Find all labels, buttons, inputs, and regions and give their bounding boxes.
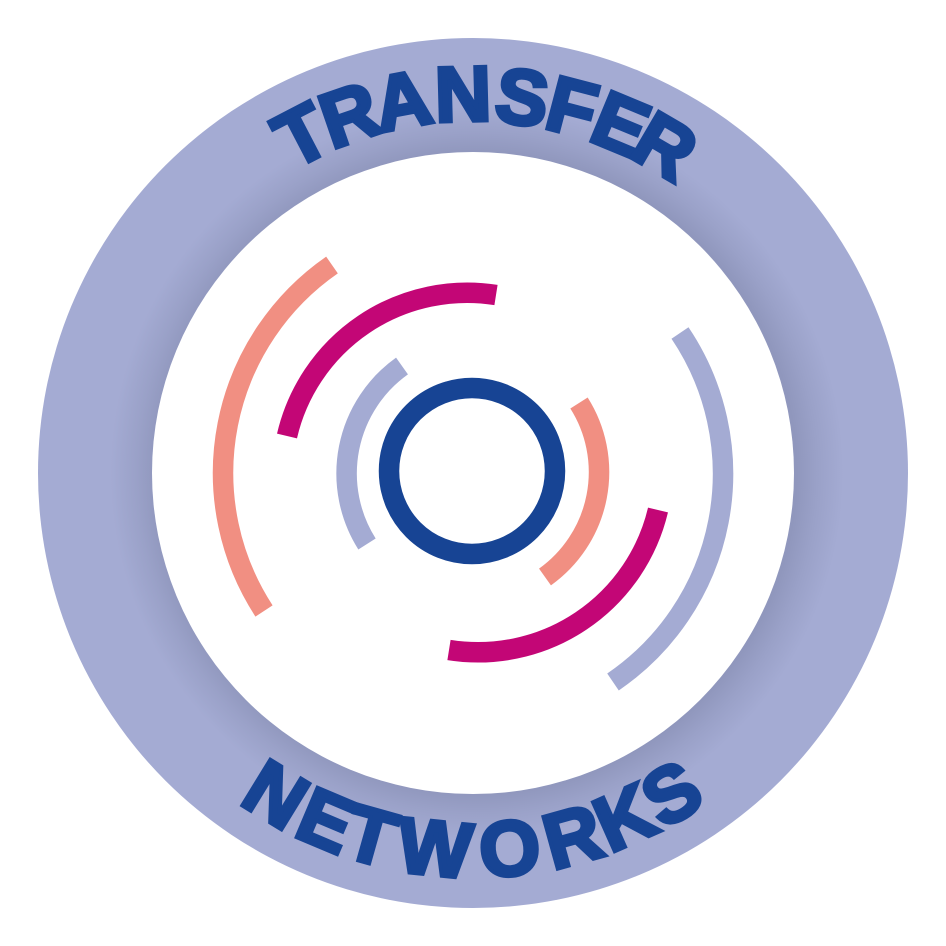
heading: NETWORKS: NETWORKS: [229, 742, 717, 896]
inner white disc: [152, 152, 794, 794]
top magenta arc: [287, 293, 496, 436]
heading: TRANSFER: TRANSFER: [260, 49, 712, 199]
outer lavender arc: [613, 333, 723, 682]
central navy ring: [389, 388, 555, 554]
bottom magenta arc: [449, 510, 658, 652]
outer salmon arc: [223, 265, 332, 611]
inner salmon arc: [545, 403, 599, 577]
inner lavender arc: [347, 366, 402, 544]
network icon: concentric arcs: [223, 265, 723, 682]
